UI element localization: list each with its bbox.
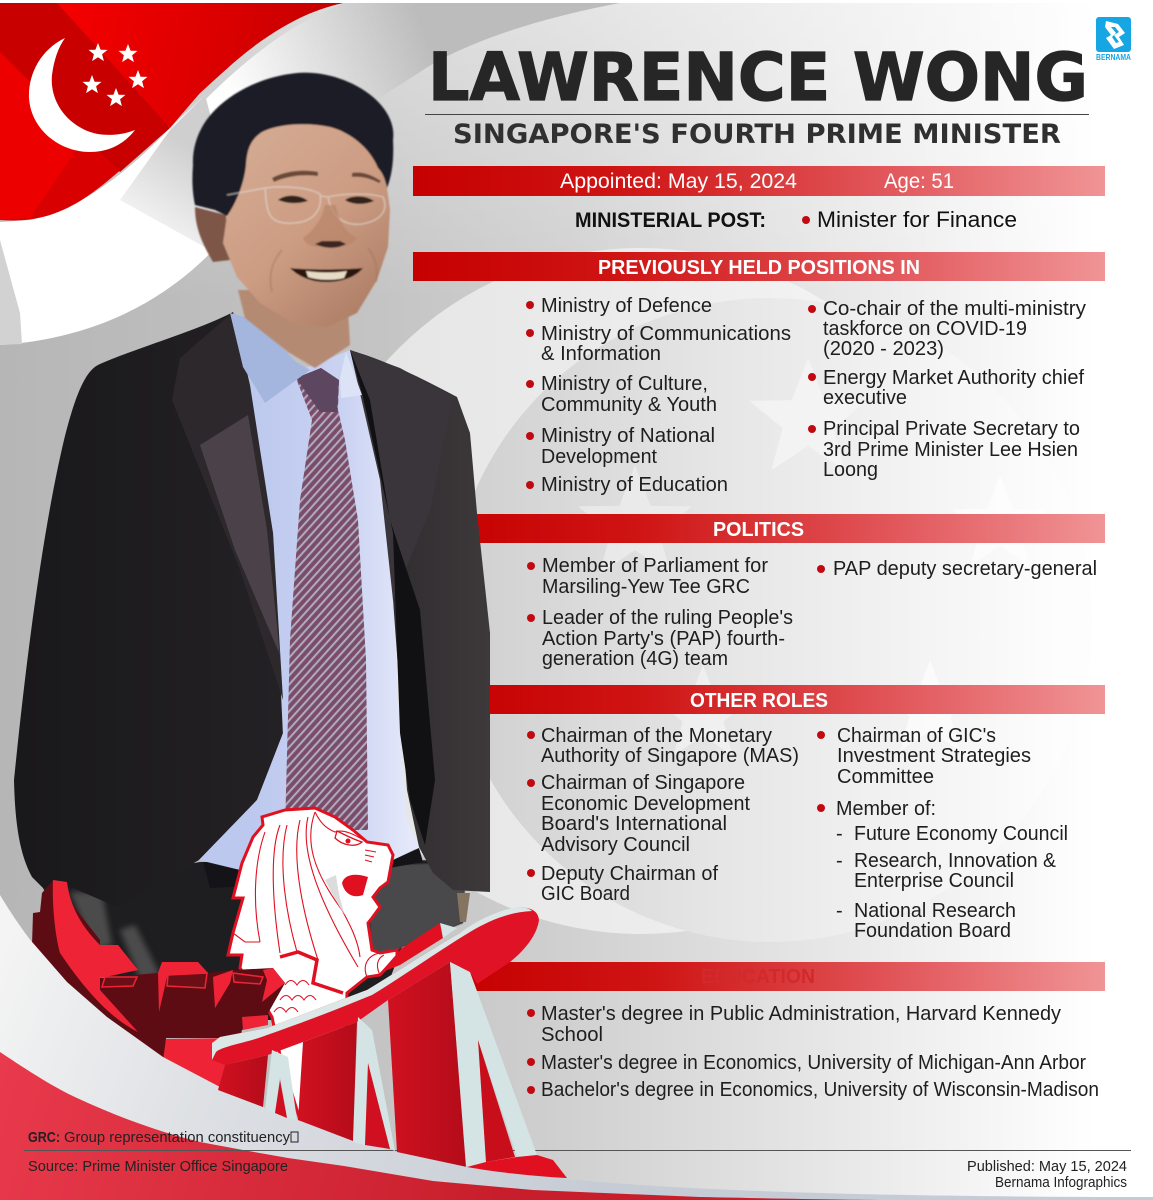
list: ministries: Ministry of Culture, <box>541 373 708 395</box>
list: ministries: Ministry of Communications <box>541 323 791 345</box>
list: politics <box>527 555 1097 670</box>
shirt collar <box>230 313 310 403</box>
footnote rule <box>24 1150 1131 1151</box>
rear block <box>380 923 457 973</box>
list: education: Master's degree in Public Administration, Harvard Kennedy <box>541 1003 1061 1025</box>
eyes <box>278 196 374 204</box>
banner: previously held positions <box>413 252 1105 281</box>
tie <box>285 368 368 830</box>
list: ministries <box>526 295 791 496</box>
list: other roles left: Advisory Council <box>541 834 690 856</box>
list: other previous positions: (2020 - 2023) <box>823 338 944 360</box>
ear <box>195 207 230 262</box>
list: other roles right: Foundation Board <box>854 920 1011 942</box>
list: other roles right: Member of: <box>836 798 936 820</box>
list: other roles right: - <box>836 850 843 872</box>
list: other previous positions <box>808 298 1086 481</box>
brows <box>272 171 381 183</box>
list: other roles right: National Research <box>854 900 1016 922</box>
swoosh: light grey curve <box>0 895 1153 1200</box>
flag: white swoosh <box>0 3 620 345</box>
jacket left side <box>14 312 283 907</box>
banner: other roles <box>450 685 1105 714</box>
left tower <box>218 1050 297 1120</box>
right tower <box>388 962 567 1178</box>
neck <box>238 290 350 368</box>
subtitle: SINGAPORE'S FOURTH PRIME MINISTER <box>453 119 1061 150</box>
list: other previous positions: Loong <box>823 459 878 481</box>
banner: politics: POLITICS <box>713 519 804 541</box>
note: GRC: Group representation constituency <box>64 1129 290 1146</box>
logo: Bernama <box>1096 17 1131 62</box>
list: politics: generation (4G) team <box>542 648 728 670</box>
list: other roles right: Investment Strategies <box>837 745 1031 767</box>
list: other previous positions: 3rd Prime Minister Lee Hsien <box>823 439 1078 461</box>
list: other roles left: GIC Board <box>541 883 630 905</box>
list: other previous positions: Energy Market Authority chief <box>823 367 1084 389</box>
list: other roles left: Deputy Chairman of <box>541 863 718 885</box>
banner: politics <box>440 514 1105 543</box>
glasses <box>227 187 385 224</box>
ministerial post: Minister for Finance <box>817 207 1017 232</box>
list: politics: Leader of the ruling People's <box>542 607 793 629</box>
portrait: Lawrence Wong <box>14 73 490 1020</box>
list: politics: Member of Parliament for <box>542 555 768 577</box>
list: other previous positions: Co-chair of the multi-ministry <box>823 298 1086 320</box>
list: other roles left: Board's International <box>541 813 727 835</box>
sky deck <box>212 907 539 1065</box>
list: other roles right: - <box>836 900 843 922</box>
trousers <box>43 860 470 1020</box>
mouth <box>290 268 363 282</box>
banner: appointed and age: Appointed: May 15, 2024 <box>560 170 797 193</box>
flag: red field with crescent and stars <box>0 3 343 220</box>
outer dark base <box>32 880 285 1062</box>
list: ministries: & Information <box>541 343 661 365</box>
list: ministries: Ministry of Defence <box>541 295 712 317</box>
list: other previous positions: Principal Private Secretary to <box>823 418 1080 440</box>
list: ministries: Ministry of National <box>541 425 715 447</box>
hair <box>192 73 393 216</box>
shirt <box>199 350 419 870</box>
illustration: ArtScience Museum <box>32 880 285 1095</box>
published credit <box>967 1158 1127 1191</box>
list: other roles right: - <box>836 823 843 845</box>
museum windows <box>102 973 263 988</box>
middle tower <box>298 1017 395 1151</box>
banner: appointed and age <box>413 166 1105 196</box>
published credit: Bernama Infographics <box>995 1174 1127 1191</box>
nose <box>303 205 357 247</box>
merlion neck band <box>280 952 343 993</box>
head and neck <box>192 73 393 368</box>
source: Source: Prime Minister Office Singapore <box>28 1158 288 1175</box>
list: politics: PAP deputy secretary-general <box>833 558 1097 580</box>
list: other roles left: Chairman of Singapore <box>541 772 745 794</box>
published credit: Published: May 15, 2024 <box>967 1158 1127 1175</box>
petal tops <box>158 962 208 1012</box>
list: other roles left: Authority of Singapore (MAS) <box>541 745 799 767</box>
title: LAWRENCE WONG <box>428 39 1088 116</box>
banner: previously held positions: PREVIOUSLY HELD POSITIONS IN <box>598 257 920 279</box>
lower block <box>163 1038 240 1095</box>
list: other roles left: Chairman of the Monetary <box>541 725 772 747</box>
jacket right side <box>350 350 490 892</box>
banner: other roles: OTHER ROLES <box>690 690 828 712</box>
banner: education: EDUCATION <box>701 966 815 988</box>
list: politics: Marsiling-Yew Tee GRC <box>542 576 750 598</box>
illustration: Merlion <box>228 808 397 1120</box>
ministerial post: MINISTERIAL POST: <box>575 209 766 232</box>
list: education: School <box>541 1024 603 1046</box>
list: other roles left: Economic Development <box>541 793 750 815</box>
list: other roles right: Committee <box>837 766 934 788</box>
right lapel <box>350 350 453 600</box>
list: other previous positions: executive <box>823 387 907 409</box>
list: other roles right: Research, Innovation & <box>854 850 1057 872</box>
list: ministries: Development <box>541 446 657 468</box>
banner: education <box>460 962 1105 991</box>
list: education: Master's degree in Economics, University of Michigan-Ann Arbor <box>541 1052 1086 1074</box>
left lapel <box>172 312 283 700</box>
list: other roles right: Chairman of GIC's <box>837 725 996 747</box>
list: other previous positions: taskforce on COVID-19 <box>823 318 1027 340</box>
list: other roles right: Enterprise Council <box>854 870 1014 892</box>
merlion mouth <box>342 875 368 896</box>
list: other roles right <box>817 725 1068 942</box>
icon: five stars <box>82 43 148 106</box>
banner: appointed and age: Age: 51 <box>884 170 954 193</box>
list: education: Bachelor's degree in Economics, University of Wisconsin-Madison <box>541 1079 1099 1101</box>
list: ministries: Community & Youth <box>541 394 717 416</box>
belt <box>203 848 423 888</box>
list: other roles left <box>527 725 799 905</box>
smile lines <box>270 248 377 292</box>
ministerial post <box>575 207 1017 232</box>
icon: crescent moon <box>29 38 135 152</box>
swoosh: red footer <box>0 1052 900 1200</box>
illustration: Marina Bay Sands <box>212 907 567 1178</box>
note: GRC: GRC: <box>28 1129 60 1146</box>
list: politics: Action Party's (PAP) fourth- <box>542 628 785 650</box>
list: education <box>527 1003 1099 1101</box>
list: other roles right: Future Economy Council <box>854 823 1068 845</box>
face <box>223 118 390 327</box>
bright red curved shell <box>53 880 138 1032</box>
list: ministries: Ministry of Education <box>541 474 728 496</box>
logo: Bernama: BERNAMA <box>1096 52 1131 62</box>
